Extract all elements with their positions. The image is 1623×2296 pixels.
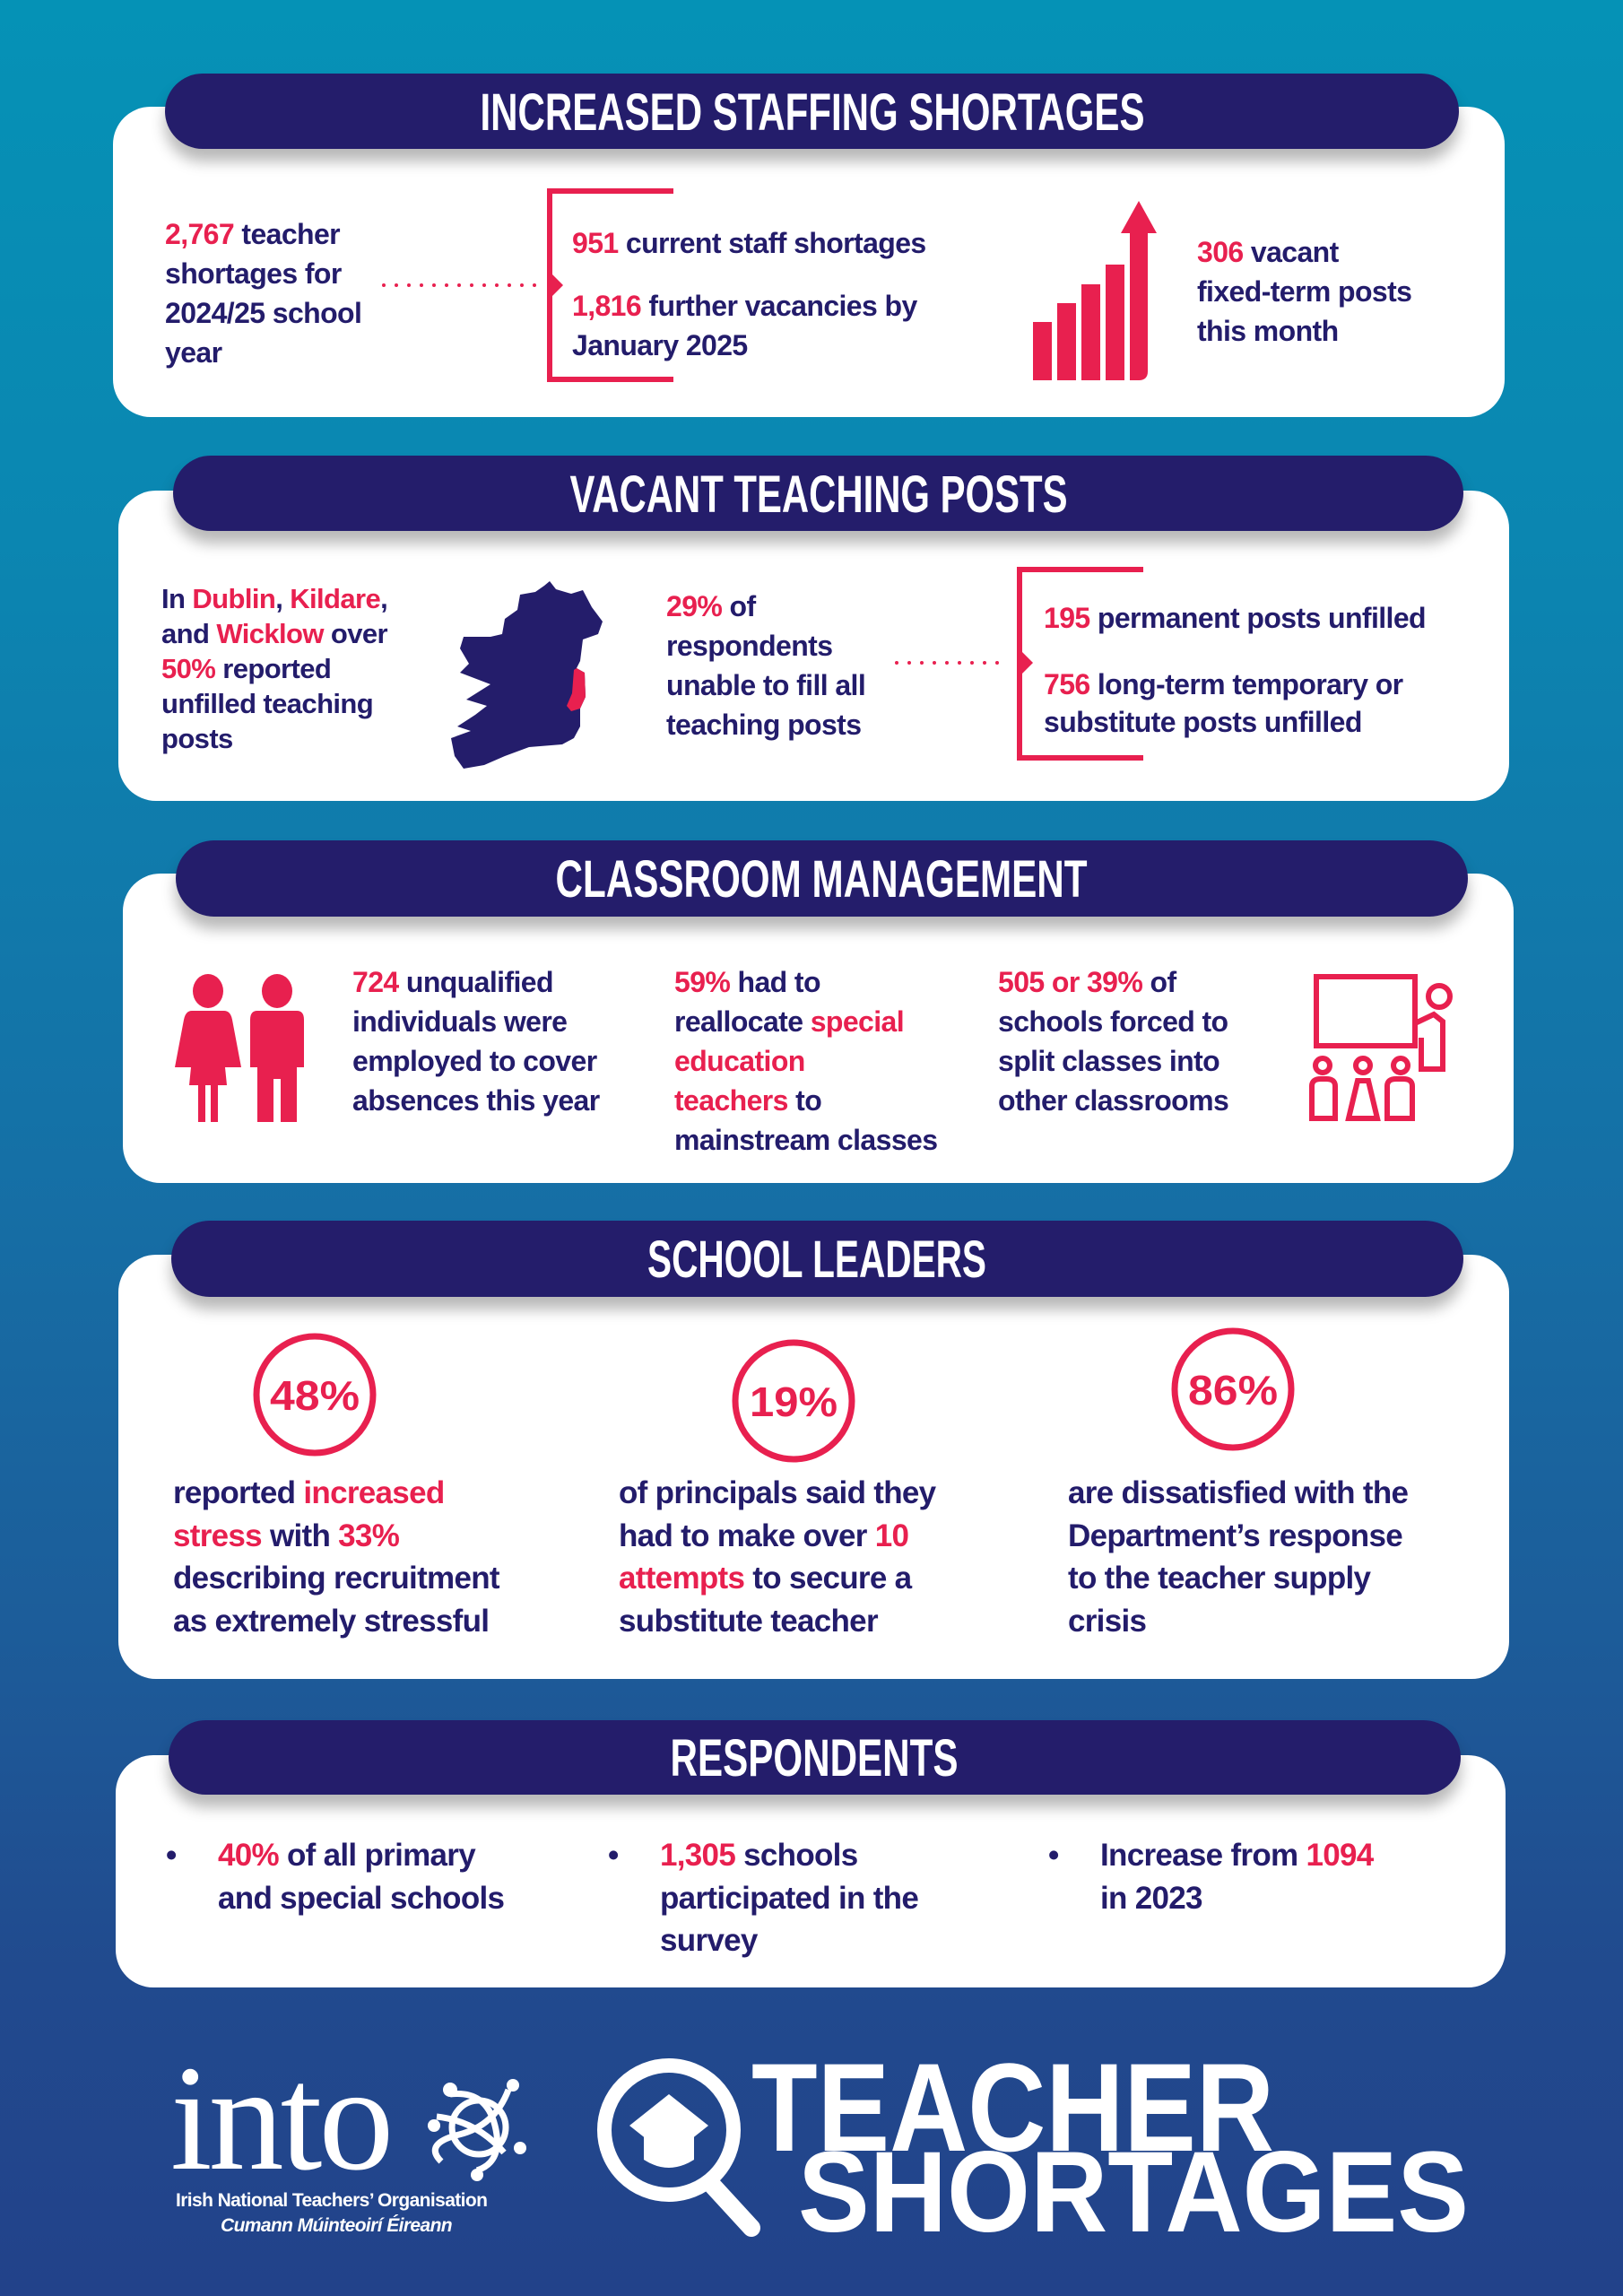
panel: respondents: in 2023	[1100, 1880, 1202, 1916]
text: 306 vacant: fixed-term posts	[1197, 275, 1411, 308]
panel: respondents: and special schools	[218, 1880, 504, 1916]
bullet: increase from 1094: •	[1048, 1838, 1059, 1873]
text: further vacancies	[572, 290, 918, 361]
text: principals attempts: attempts to secure a	[619, 1561, 911, 1596]
icon: classroom	[1309, 974, 1453, 1121]
heading: classroom management	[176, 840, 1468, 917]
bullet: 40%	[166, 1838, 504, 1916]
bullet: increase from 1094	[1048, 1838, 1374, 1916]
text: 2,767 teacher shortages: 2024/25 school	[165, 297, 361, 329]
text: 29% of respondents: respondents	[666, 630, 832, 662]
text: 505 or 39%: split classes into	[998, 1045, 1219, 1077]
title: teacher shortages	[597, 2054, 1469, 2242]
text: Dublin Kildare Wicklow: 50% reported	[161, 653, 331, 684]
bullet: 1,305 schools	[608, 1838, 918, 1958]
text: 756 long-term: substitute posts unfilled	[1044, 706, 1362, 738]
text: 505 or 39%: 505 or 39% of	[998, 966, 1176, 998]
text: dissatisfied: Department’s response	[1068, 1518, 1402, 1553]
text: increased stress: describing recruitment	[173, 1561, 499, 1596]
panel: respondents: Increase from 1094	[1100, 1838, 1374, 1873]
text: 59% reallocate: reallocate special	[674, 1005, 904, 1038]
panel: school leaders	[118, 1221, 1509, 1679]
text: 2,767 teacher shortages: 2,767 teacher	[165, 218, 340, 250]
text: 724 unqualified	[352, 966, 600, 1117]
text: 724 unqualified: 724 unqualified	[352, 966, 553, 998]
text: increased stress: as extremely stressful	[173, 1604, 489, 1638]
bullet: 1,305 schools: •	[608, 1838, 619, 1873]
text: 2,767 teacher shortages	[165, 218, 361, 369]
text: 2,767 teacher shortages: shortages for	[165, 257, 342, 290]
text: increased stress: reported increased	[173, 1475, 445, 1510]
heading: school leaders	[171, 1221, 1463, 1297]
text: current shortages: 951 current staff shortages	[572, 227, 926, 259]
text: 724 unqualified: individuals were	[352, 1005, 567, 1038]
text: increased stress	[173, 1475, 500, 1638]
text: dissatisfied: are dissatisfied with the	[1068, 1475, 1408, 1510]
icon: rising bar chart	[1033, 201, 1157, 380]
heading: school leaders: SCHOOL LEADERS	[647, 1231, 986, 1289]
text: principals attempts	[619, 1475, 936, 1638]
arrow: dotted connector	[382, 283, 536, 287]
icon: map of Ireland	[451, 581, 603, 769]
stat: 86%: 86%	[1188, 1367, 1278, 1413]
panel: respondents: 40% of all primary	[218, 1838, 475, 1873]
heading: respondents: RESPONDENTS	[671, 1729, 958, 1787]
panel: respondents: 1,305 schools	[660, 1838, 857, 1873]
panel: respondents: participated in the	[660, 1880, 918, 1916]
text: dissatisfied: crisis	[1068, 1604, 1146, 1638]
text: Dublin Kildare Wicklow: In Dublin, Kildare,	[161, 583, 387, 614]
heading: vacant teaching posts	[173, 456, 1463, 531]
text: 59% reallocate: 59% had to	[674, 966, 820, 998]
text: 195 permanent posts: 195 permanent posts unfilled	[1044, 602, 1426, 634]
text: Dublin Kildare Wicklow: unfilled teaching	[161, 688, 373, 719]
panel: respondents: survey	[660, 1923, 758, 1958]
heading: classroom management: CLASSROOM MANAGEMENT	[556, 850, 1087, 909]
stat: 48%: 48%	[270, 1372, 360, 1419]
text: 29% of respondents: 29% of	[666, 590, 756, 622]
panel: vacant teaching posts	[118, 456, 1509, 801]
bracket	[547, 188, 673, 382]
logo wordmark: into	[170, 2035, 390, 2202]
logo: INTO	[170, 2035, 526, 2236]
text: further vacancies: January 2025	[572, 329, 748, 361]
text: principals attempts: of principals said they	[619, 1475, 935, 1510]
text: further vacancies: 1,816 further vacancies by	[572, 290, 917, 322]
panel: classroom management	[123, 840, 1514, 1183]
text: 59% reallocate: education	[674, 1045, 805, 1077]
text: 756 long-term: 756 long-term temporary or	[1044, 668, 1403, 700]
text: principals attempts: substitute teacher	[619, 1604, 878, 1638]
stat: 19%: 19%	[750, 1378, 838, 1425]
text: 59% reallocate: teachers to	[674, 1084, 821, 1117]
text: 306 vacant	[1197, 236, 1411, 347]
text: 29% of respondents: teaching posts	[666, 709, 861, 741]
text: 2,767 teacher shortages: year	[165, 336, 221, 369]
text: Dublin Kildare Wicklow	[161, 583, 387, 754]
text: 505 or 39%: schools forced to	[998, 1005, 1228, 1038]
text: increased stress: stress with 33%	[173, 1518, 399, 1553]
heading: increased staffing shortages: INCREASED STAFFING SHORTAGES	[481, 83, 1144, 142]
text: 306 vacant: 306 vacant	[1197, 236, 1339, 268]
heading: vacant teaching posts: VACANT TEACHING POSTS	[570, 465, 1067, 524]
text: 505 or 39%: other classrooms	[998, 1084, 1228, 1117]
text: dissatisfied: to the teacher supply	[1068, 1561, 1370, 1596]
text: 756 long-term	[1044, 668, 1403, 738]
text: Dublin Kildare Wicklow: posts	[161, 723, 233, 754]
heading: increased staffing shortages	[165, 74, 1459, 149]
text: principals attempts: had to make over 10	[619, 1518, 908, 1553]
icon: people	[175, 974, 304, 1122]
text: dissatisfied	[1068, 1475, 1408, 1638]
title text	[751, 2054, 1469, 2242]
text: 59% reallocate: mainstream classes	[674, 1124, 937, 1156]
text: 306 vacant: this month	[1197, 315, 1339, 347]
panel: increased staffing shortages	[113, 74, 1505, 417]
bracket	[1017, 567, 1143, 761]
text: 59% reallocate	[674, 966, 937, 1156]
icon: magnifier with cap	[597, 2058, 760, 2237]
text: organisation name: Irish National Teachers’ Organisation	[176, 2190, 487, 2211]
heading: respondents	[169, 1720, 1461, 1795]
stat: 86%	[1171, 1327, 1295, 1451]
text: organisation name	[176, 2190, 487, 2236]
stat: 48%	[253, 1333, 377, 1457]
panel: respondents	[116, 1720, 1506, 1987]
text: 505 or 39%	[998, 966, 1228, 1117]
text: 724 unqualified: employed to cover	[352, 1045, 597, 1077]
text: 29% of respondents	[666, 590, 865, 741]
icon: emblem	[428, 2079, 526, 2181]
bullet: 40%: •	[166, 1838, 177, 1873]
stat: 19%	[732, 1340, 855, 1462]
text: 29% of respondents: unable to fill all	[666, 669, 865, 701]
arrow: dotted connector	[895, 661, 999, 665]
text: 724 unqualified: absences this year	[352, 1084, 600, 1117]
text: Dublin Kildare Wicklow: and Wicklow over	[161, 618, 387, 649]
text: organisation name: Cumann Múinteoirí Éireann	[221, 2215, 452, 2236]
